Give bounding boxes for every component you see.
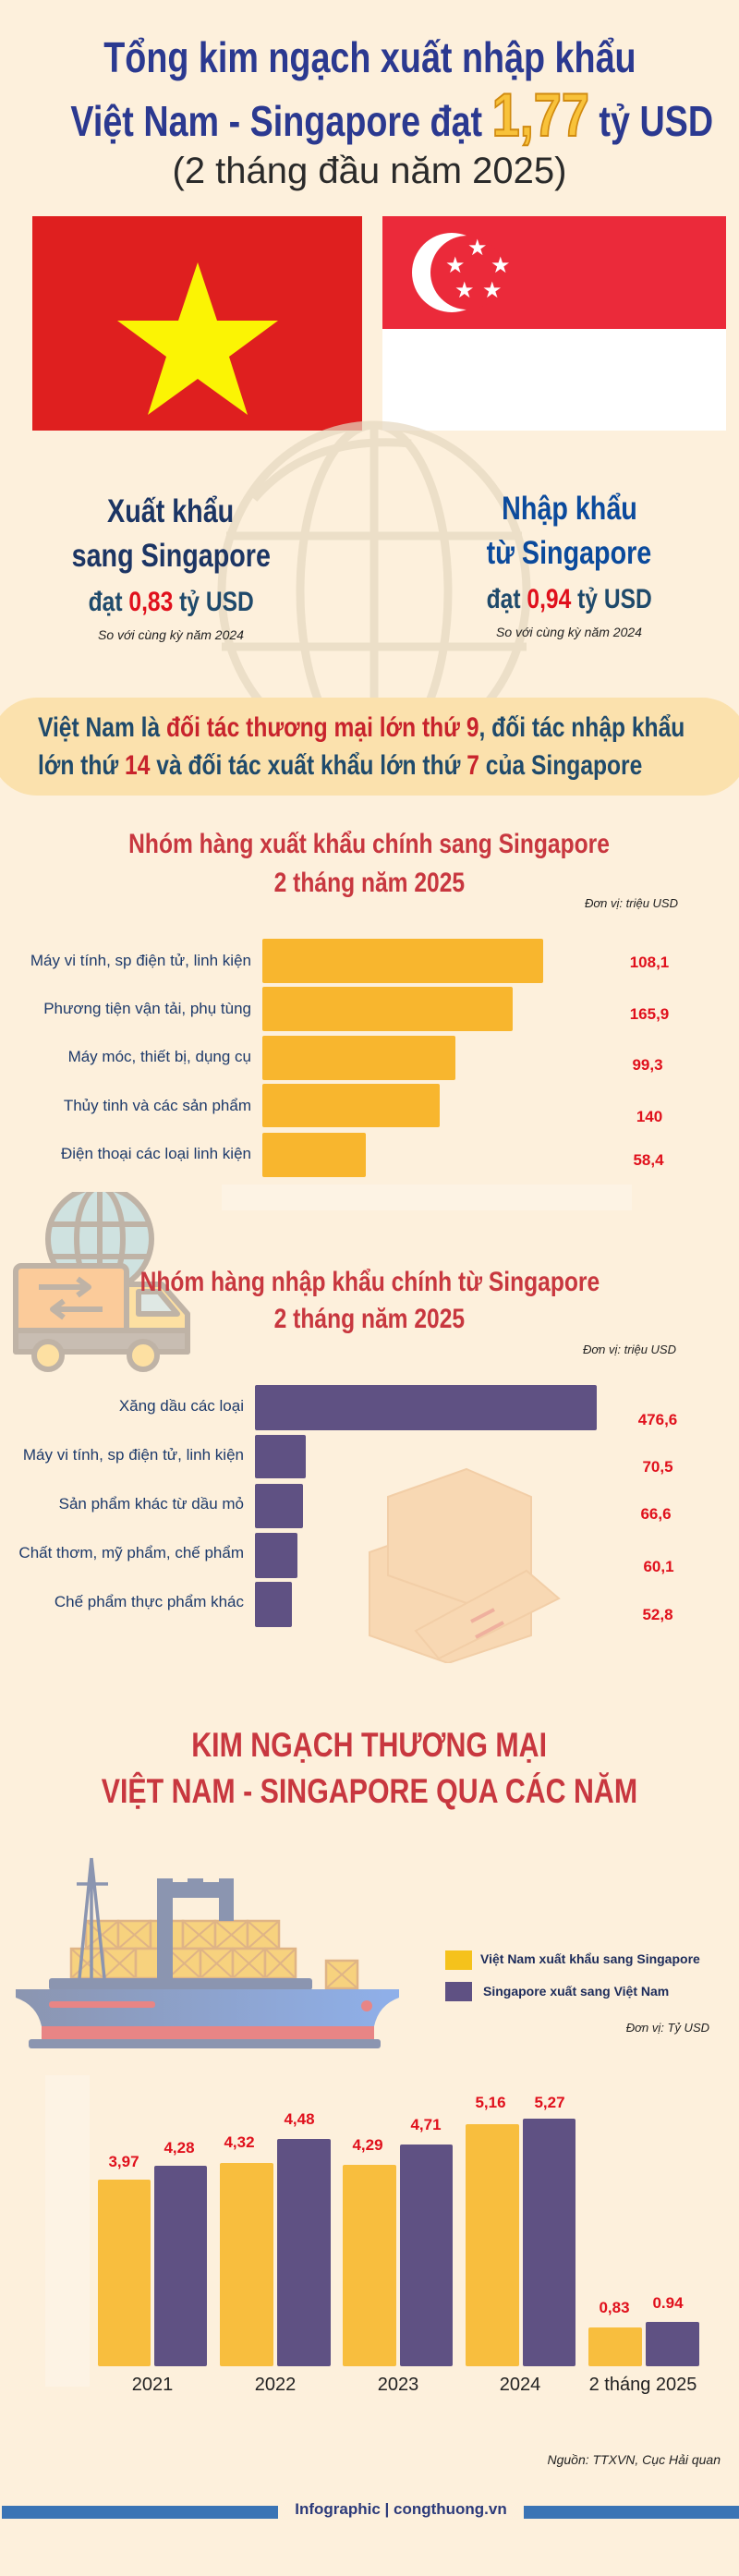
- export bar chart: Điện thoại các loại linh kiện: [61, 1145, 251, 1162]
- grouped bar chart: yearly trade: 0,83: [599, 2299, 630, 2316]
- title: [70, 33, 713, 191]
- import summary: đạt 0,94 tỷ USD: [486, 584, 652, 614]
- export bar chart: Thủy tinh và các sản phẩm: [64, 1097, 251, 1114]
- export bar chart: 140: [636, 1108, 662, 1125]
- flag: Singapore: ★: [454, 277, 475, 303]
- grouped bar chart: yearly trade: 2022: [255, 2375, 296, 2395]
- unit note: Đơn vị: triệu USD: [583, 1343, 676, 1356]
- export chart title: Nhóm hàng xuất khẩu chính sang Singapore: [129, 829, 610, 859]
- export summary: So với cùng kỳ năm 2024: [98, 627, 244, 642]
- title: Việt Nam - Singapore đạt 1,77 tỷ USD: [70, 80, 713, 149]
- import summary: So với cùng kỳ năm 2024: [496, 625, 642, 639]
- import bar chart: 70,5: [642, 1458, 673, 1476]
- import summary: [486, 491, 652, 639]
- legend: [445, 1950, 700, 2001]
- flag: Vietnam: [32, 216, 362, 431]
- import bar chart: 476,6: [638, 1411, 677, 1428]
- import bar chart: [18, 1385, 677, 1627]
- grouped bar chart: yearly trade: 2 tháng 2025: [589, 2375, 697, 2395]
- callout: partner ranking: [0, 698, 739, 796]
- grouped bar chart: yearly trade: 2024: [500, 2375, 540, 2395]
- export summary: Xuất khẩu: [107, 493, 235, 529]
- import bar chart: Xăng dầu các loại: [119, 1397, 244, 1415]
- export chart title: 2 tháng năm 2025: [274, 868, 465, 898]
- export bar chart: [30, 939, 669, 1177]
- export bar chart: 165,9: [630, 1005, 669, 1023]
- flag: Singapore: ★: [482, 277, 503, 303]
- flag: Singapore: ★: [491, 252, 511, 278]
- section title: trade over years: KIM NGẠCH THƯƠNG MẠI: [192, 1726, 547, 1764]
- import bar chart: Sản phẩm khác từ dầu mỏ: [59, 1495, 244, 1513]
- import bar chart: Chất thơm, mỹ phẩm, chế phẩm: [18, 1544, 244, 1561]
- grouped bar chart: yearly trade: 4,71: [410, 2116, 442, 2133]
- callout: partner ranking: lớn thứ 14 và đối tác xuất khẩu lớn thứ 7 của Singapore: [38, 750, 642, 781]
- illustration: boxes: [369, 1468, 561, 1663]
- export bar chart: 58,4: [633, 1151, 664, 1169]
- export bar chart: 99,3: [632, 1056, 663, 1074]
- footer: [2, 2500, 739, 2519]
- flag: Singapore: ★: [445, 252, 466, 278]
- grouped bar chart: yearly trade: 4,32: [224, 2133, 255, 2151]
- legend: Việt Nam xuất khẩu sang Singapore: [480, 1951, 700, 1966]
- section title: trade over years: [102, 1726, 637, 1810]
- grouped bar chart: yearly trade: 5,27: [534, 2094, 565, 2111]
- unit note: Đơn vị: Tỷ USD: [626, 2021, 709, 2035]
- import chart title: Nhóm hàng nhập khẩu chính từ Singapore: [139, 1267, 600, 1297]
- grouped bar chart: yearly trade: 2023: [378, 2375, 418, 2395]
- export bar chart: Máy móc, thiết bị, dụng cụ: [68, 1048, 251, 1065]
- import bar chart: 66,6: [640, 1505, 672, 1523]
- import summary: từ Singapore: [487, 535, 651, 571]
- import bar chart: 60,1: [643, 1558, 674, 1575]
- grouped bar chart: yearly trade: 5,16: [475, 2094, 506, 2111]
- section title: trade over years: VIỆT NAM - SINGAPORE QUA CÁC NĂM: [102, 1772, 637, 1810]
- illustration: cargo ship: [16, 1857, 399, 2048]
- icon: delivery truck with globe: [13, 1192, 190, 1372]
- import bar chart: 52,8: [642, 1606, 673, 1623]
- import bar chart: Chế phẩm thực phẩm khác: [55, 1593, 244, 1610]
- grouped bar chart: yearly trade: 0.94: [652, 2294, 684, 2312]
- grouped bar chart: yearly trade: 2021: [132, 2375, 173, 2395]
- export summary: đạt 0,83 tỷ USD: [88, 587, 254, 617]
- grouped bar chart: yearly trade: 4,29: [352, 2136, 383, 2154]
- export chart title: [129, 829, 610, 898]
- watermark globe: [218, 421, 530, 698]
- flag: Singapore: ★: [467, 235, 488, 261]
- legend: Singapore xuất sang Việt Nam: [483, 1984, 669, 1999]
- flag: Singapore: [382, 216, 726, 431]
- footer: Infographic | congthuong.vn: [295, 2500, 507, 2518]
- import summary: Nhập khẩu: [502, 491, 636, 527]
- grouped bar chart: yearly trade: 4,48: [284, 2110, 315, 2128]
- grouped bar chart: yearly trade: 4,28: [164, 2139, 195, 2157]
- unit note: Đơn vị: triệu USD: [585, 896, 678, 910]
- export bar chart: 108,1: [630, 954, 669, 971]
- import chart title: 2 tháng năm 2025: [274, 1304, 465, 1334]
- import chart title: [139, 1267, 600, 1334]
- export summary: [71, 493, 271, 642]
- import bar chart: Máy vi tính, sp điện tử, linh kiện: [23, 1446, 244, 1464]
- title: (2 tháng đầu năm 2025): [172, 151, 566, 191]
- grouped bar chart: yearly trade: [98, 2094, 699, 2395]
- export summary: sang Singapore: [71, 538, 271, 574]
- export bar chart: Phương tiện vận tải, phụ tùng: [43, 1000, 251, 1017]
- grouped bar chart: yearly trade: 3,97: [108, 2153, 139, 2170]
- source note: Nguồn: TTXVN, Cục Hải quan: [547, 2452, 721, 2467]
- title: Tổng kim ngạch xuất nhập khẩu: [103, 33, 636, 81]
- callout: partner ranking: Việt Nam là đối tác thương mại lớn thứ 9, đối tác nhập khẩu: [38, 712, 684, 743]
- export bar chart: Máy vi tính, sp điện tử, linh kiện: [30, 952, 251, 969]
